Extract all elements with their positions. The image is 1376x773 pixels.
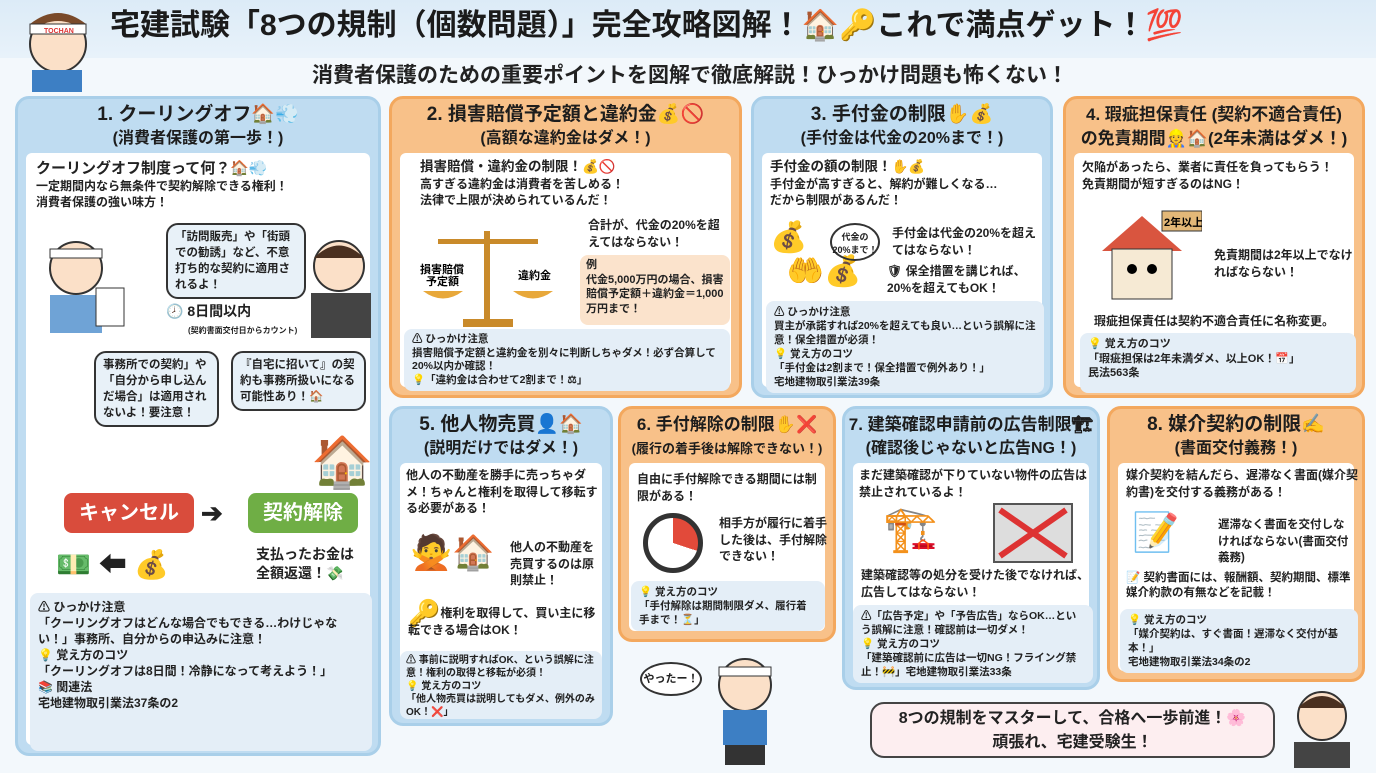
- note: 宅地建物取引業法34条の2: [1128, 656, 1251, 668]
- icon: teacher: [311, 240, 371, 338]
- note: [631, 581, 825, 631]
- note: trap: 宅地建物取引業法37条の2: [38, 696, 178, 710]
- note: trap: 📚 関連法: [38, 680, 92, 694]
- text: refund: 全額返還！💸: [256, 565, 343, 581]
- icon: money return: 💵 ⬅ 💰: [56, 549, 169, 580]
- note: trap: 💡「違約金は合わせて2割まで！⚖」: [412, 374, 587, 386]
- note: 💡 覚え方のコツ: [774, 348, 853, 360]
- heading 6: [632, 414, 822, 456]
- icon: scale: 違約金: [518, 268, 551, 282]
- icon: cheering student: [640, 658, 772, 765]
- panel: 7 advertising: [842, 406, 1100, 690]
- bubble: visit sales: 「訪問販売」や「街頭での勧誘」など、不意打ち的な契約に適用されるよ！: [175, 231, 290, 291]
- text: 免責期間が短すぎるのはNG！: [1082, 176, 1244, 190]
- text: 媒介契約を結んだら、遅滞なく書面(媒介契約書)を交付する義務がある！: [1126, 468, 1358, 498]
- text: 欠陥があったら、業者に責任を負ってもらう！: [1082, 160, 1333, 174]
- note: 買主が承諾すれば20%を超えても良い…という誤解に注意！保全措置が必須！: [774, 320, 1035, 346]
- note: 💡 覚え方のコツ: [861, 638, 940, 650]
- bubble: 20%: [830, 223, 880, 261]
- text: what is cooling off: 消費者保護の強い味方！: [36, 195, 168, 209]
- bubble: visit sales: [166, 223, 306, 299]
- text: 8 days: (契約書面交付日からカウント): [188, 326, 297, 334]
- heading 6: 6. 手付解除の制限✋❌: [637, 415, 817, 434]
- icon: money bags: 💰: [770, 221, 807, 254]
- note: trap: [404, 329, 730, 391]
- note: 💡 覚え方のコツ: [1088, 338, 1171, 350]
- heading 4: 4. 瑕疵担保責任 (契約不適合責任): [1086, 105, 1342, 124]
- note: trap: ⚠ ひっかけ注意: [38, 600, 125, 614]
- text: after performance: 相手方が履行に着手した後は、手付解除できない！: [719, 516, 827, 563]
- note: 「手付解除は期間制限ダメ、履行着手まで！⏳」: [639, 600, 807, 626]
- text: what is cooling off: [36, 160, 288, 209]
- heading 7: (確認後じゃないと広告NG！): [866, 440, 1076, 457]
- text: limit: 法律で上限が決められているんだ！: [420, 193, 612, 207]
- heading 5: 5. 他人物売買👤🏠: [419, 414, 583, 435]
- note: 「手付金は2割まで！保全措置で例外あり！」: [774, 362, 990, 374]
- text: prohibited: 他人の不動産を売買するのは原則禁止！: [510, 540, 594, 587]
- example box: 例: [586, 259, 597, 271]
- text: 建築確認等の処分を受けた後でなければ、広告してはならない！: [861, 568, 1089, 598]
- note: [1080, 333, 1356, 393]
- icon: document: 📝: [1132, 512, 1179, 554]
- note: ⚠ ひっかけ注意: [774, 306, 850, 318]
- text: limit: [420, 159, 624, 207]
- contract cancel button: [248, 493, 358, 533]
- heading 1: 1. クーリングオフ🏠💨: [97, 104, 299, 125]
- heading 1: (消費者保護の第一歩！): [113, 130, 283, 147]
- note: trap: 「クーリングオフは8日間！冷静になって考えよう！」: [38, 664, 332, 678]
- heading 8: (書面交付義務！): [1175, 440, 1297, 457]
- text: refund: [256, 546, 354, 581]
- heading 3: 3. 手付金の制限✋💰: [811, 104, 993, 125]
- heading 1: [97, 104, 299, 147]
- text: deposit limit: 手付金が高すぎると、解約が難しくなる…: [770, 176, 998, 190]
- text: deposit limit: 手付金の額の制限！✋💰: [770, 159, 925, 174]
- subtitle: 消費者保護のための重要ポイントを図解で徹底解説！ひっかけ問題も怖くない！: [312, 64, 1068, 87]
- heading 8: [1147, 414, 1325, 457]
- note: 💡 覚え方のコツ: [639, 586, 718, 598]
- text: period: 免責期間は2年以上でなければならない！: [1214, 248, 1353, 278]
- icon: key + text: 🔑: [408, 598, 440, 628]
- text: deposit limit: [770, 159, 998, 207]
- text: 遅滞なく書面を交付しなければならない(書面交付義務): [1218, 519, 1348, 564]
- cancel button: [64, 493, 194, 533]
- icon: money bags: [770, 220, 861, 288]
- note: 💡 覚え方のコツ: [1128, 614, 1207, 626]
- icon: crane: 🏗️: [883, 505, 938, 554]
- heading 3: (手付金は代金の20%まで！): [801, 130, 1003, 147]
- text: what is cooling off: クーリングオフ制度って何？🏠💨: [36, 160, 268, 177]
- icon: scale: [420, 231, 553, 327]
- example box: [580, 255, 730, 325]
- note: trap: 損害賠償予定額と違約金を別々に判断しちゃダメ！必ず合算して20%以内か確認！: [412, 346, 716, 372]
- panel: 1 cooling off: [15, 96, 381, 756]
- note: 💡 覚え方のコツ: [406, 681, 481, 692]
- text: [1082, 160, 1333, 190]
- text: 8 days: 🕗 8日間以内: [166, 303, 251, 319]
- text: limit: 損害賠償・違約金の制限！💰🚫: [420, 159, 616, 174]
- panel: 2 damages: [389, 96, 742, 398]
- bubble: home: 『自宅に招いて』の契約も事務所扱いになる可能性あり！🏠: [240, 359, 355, 403]
- icon: mascot student: TOCHAN: [44, 28, 74, 35]
- note: [853, 605, 1093, 683]
- heading 8: 8. 媒介契約の制限✍: [1147, 414, 1325, 435]
- text: rename: 瑕疵担保責任は契約不適合責任に名称変更。: [1094, 314, 1334, 328]
- icon: house with sign: [1102, 210, 1202, 300]
- note: trap: 「クーリングオフはどんな場合でもできる…わけじゃない！」事務所、自分からの申込みに注意！: [38, 616, 337, 646]
- bubble: yatta: [640, 662, 702, 696]
- icon: scale: 予定額: [426, 274, 459, 288]
- icon: crossed newspaper: [993, 503, 1073, 563]
- title: 宅建試験「8つの規制（個数問題）」完全攻略図解！🏠🔑これで満点ゲット！💯: [110, 9, 1183, 42]
- heading 2: [427, 103, 704, 147]
- note: trap: ⚠ ひっかけ注意: [412, 333, 488, 345]
- callout: closing message: [870, 702, 1275, 758]
- heading 2: (高額な違約金はダメ！): [480, 130, 651, 147]
- bubble: yatta: やったー！: [644, 673, 698, 685]
- text: 20%: 合計が、代金の20%を超えてはならない！: [588, 218, 720, 248]
- icon: teacher bottom right: [1294, 691, 1350, 768]
- bubble: 20%: 20%まで！: [832, 245, 878, 255]
- note: 宅地建物取引業法39条: [774, 376, 880, 388]
- panel: 3 deposit: [751, 96, 1053, 398]
- icon: NO person: 🙅🏠: [410, 534, 495, 572]
- note: 「他人物売買は説明してもダメ、例外のみOK！❌」: [406, 694, 595, 718]
- note: 「媒介契約は、すぐ書面！遅滞なく交付が基本！」: [1128, 628, 1338, 654]
- bubble: office: 事務所での契約」や「自分から申し込んだ場合」は適用されないよ！要注意！: [103, 359, 206, 419]
- callout: closing message: 8つの規制をマスターして、合格へ一歩前進！🌸: [899, 710, 1246, 727]
- text: 自由に手付解除できる期間には制限がある！: [637, 472, 817, 502]
- panel: 5 others' property: [389, 406, 613, 726]
- heading 5: (説明だけではダメ！): [424, 440, 578, 457]
- example box: 代金5,000万円の場合、損害賠償予定額＋違約金＝1,000万円まで！: [586, 274, 724, 314]
- panel: 6 deposit cancellation: [618, 406, 836, 642]
- text: まだ建築確認が下りていない物件の広告は禁止されているよ！: [859, 468, 1087, 498]
- text: deposit limit: だから制限があるんだ！: [770, 193, 902, 207]
- text: refund: 支払ったお金は: [256, 546, 354, 562]
- heading 5: [419, 413, 583, 457]
- panel: 4 warranty: [1063, 96, 1365, 398]
- note: 「建築確認前に広告は一切NG！フライング禁止！🚧」宅地建物取引業法33条: [861, 652, 1076, 678]
- note: trap: [30, 593, 372, 751]
- text: 20%: 手付金は代金の20%を超えてはならない！: [892, 226, 1036, 256]
- note: [1120, 609, 1358, 673]
- title bar: [0, 0, 1376, 58]
- bubble: 20%: 代金の: [841, 232, 868, 242]
- panel: 8 brokerage: [1107, 406, 1365, 682]
- text: what is cooling off: 一定期間内なら無条件で契約解除できる権利！: [36, 178, 288, 192]
- note: 「瑕疵担保は2年未満ダメ、以上OK！📅」: [1088, 352, 1300, 364]
- icon: house: 🏠: [311, 434, 373, 490]
- heading 7: [849, 415, 1093, 457]
- icon: stopwatch: [643, 513, 703, 573]
- bubble: office: [94, 351, 219, 427]
- cancel button: キャンセル: [79, 502, 179, 524]
- heading 7: 7. 建築確認申請前の広告制限🏗: [849, 415, 1093, 434]
- icon: key + text: 権利を取得して、買い主に移転できる場合はOK！: [408, 606, 595, 636]
- note: ⚠ 事前に説明すればOK、という誤解に注意！権利の取得と移転が必須！: [406, 655, 594, 679]
- heading 4: の免責期間👷🏠(2年未満はダメ！): [1081, 129, 1347, 148]
- callout: closing message: 頑張れ、宅建受験生！: [992, 734, 1153, 751]
- heading 2: 2. 損害賠償予定額と違約金💰🚫: [427, 104, 704, 125]
- text: 8 days: [166, 303, 297, 334]
- icon: worried student: [49, 241, 124, 333]
- note: [766, 301, 1044, 393]
- heading 4: [1081, 105, 1347, 148]
- text: limit: 高すぎる違約金は消費者を苦しめる！: [420, 176, 624, 190]
- arrow: ➔: [201, 498, 223, 528]
- icon: scale: 損害賠償: [420, 262, 464, 276]
- text: shield: 🛡 保全措置を講じれば、20%を超えてもOK！: [887, 264, 1026, 294]
- bubble: home: [231, 351, 366, 411]
- icon: money bags: 🤲💰: [787, 255, 861, 288]
- heading 6: (履行の着手後は解除できない！): [632, 441, 822, 456]
- note: 民法563条: [1088, 367, 1139, 379]
- text: 他人の不動産を勝手に売っちゃダメ！ちゃんと権利を取得して移転する必要がある！: [406, 468, 598, 515]
- note: [400, 651, 602, 719]
- icon: mascot student: [29, 13, 87, 92]
- contract cancel button: 契約解除: [263, 502, 343, 524]
- note: trap: 💡 覚え方のコツ: [38, 648, 128, 662]
- text: contents: 📝 契約書面には、報酬額、契約期間、標準媒介約款の有無などを記載！: [1126, 572, 1351, 599]
- note: ⚠「広告予定」や「予告広告」ならOK…という誤解に注意！確認前は一切ダメ！: [861, 610, 1076, 636]
- heading 3: [801, 103, 1003, 147]
